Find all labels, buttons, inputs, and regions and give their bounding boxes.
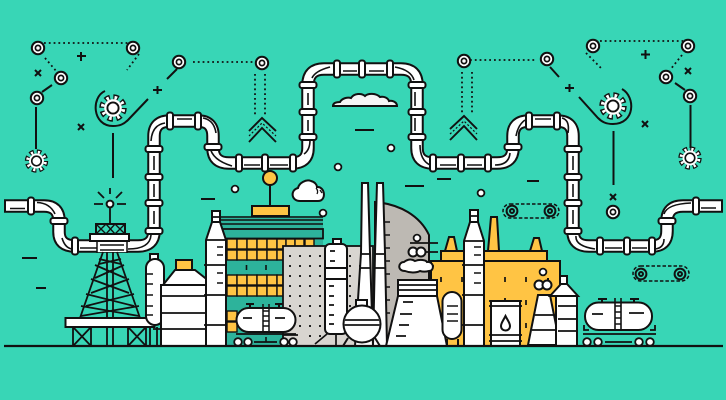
steam puffs	[408, 248, 418, 256]
cooling tower with steam	[386, 235, 447, 346]
spherical tank	[343, 300, 380, 346]
twin tall stacks	[355, 183, 387, 346]
drop icon	[501, 316, 510, 330]
right cone tower with steam	[528, 269, 560, 345]
white bottle tower	[462, 210, 485, 346]
grey dotted building	[283, 246, 373, 346]
left linkage diagram	[28, 42, 139, 170]
oil derrick	[66, 188, 157, 346]
oil drum	[489, 298, 522, 346]
left top nodes and chevrons	[173, 56, 276, 142]
right linkage diagram	[586, 40, 699, 167]
storage tank with roof	[146, 254, 214, 346]
left tanker wagon	[234, 304, 298, 346]
right belt with gear	[550, 67, 631, 218]
conveyor belts	[503, 204, 689, 281]
right top nodes and chevrons	[450, 53, 553, 140]
rounded pill tank	[442, 292, 462, 346]
yellow factory	[431, 217, 560, 346]
antenna	[94, 188, 126, 224]
scattered dashes and dots	[22, 130, 539, 288]
window grid	[227, 239, 314, 332]
white bottle tower left	[204, 211, 227, 346]
left belt with gear	[96, 69, 177, 178]
green and yellow building	[219, 171, 326, 346]
vertical cylinder tank	[315, 239, 347, 346]
base legs	[73, 327, 157, 346]
pipe highlights	[10, 67, 716, 249]
main pipeline	[4, 60, 723, 254]
deck	[66, 318, 154, 327]
cloud above centre	[333, 94, 397, 106]
small cloud	[293, 180, 324, 201]
right stepped house tower	[550, 276, 578, 346]
lattice head	[96, 224, 125, 234]
tower frame	[80, 252, 140, 318]
grey dome building	[375, 202, 429, 346]
ground line	[4, 345, 723, 347]
pipe collars	[28, 60, 699, 254]
right tanker wagon	[583, 298, 656, 346]
